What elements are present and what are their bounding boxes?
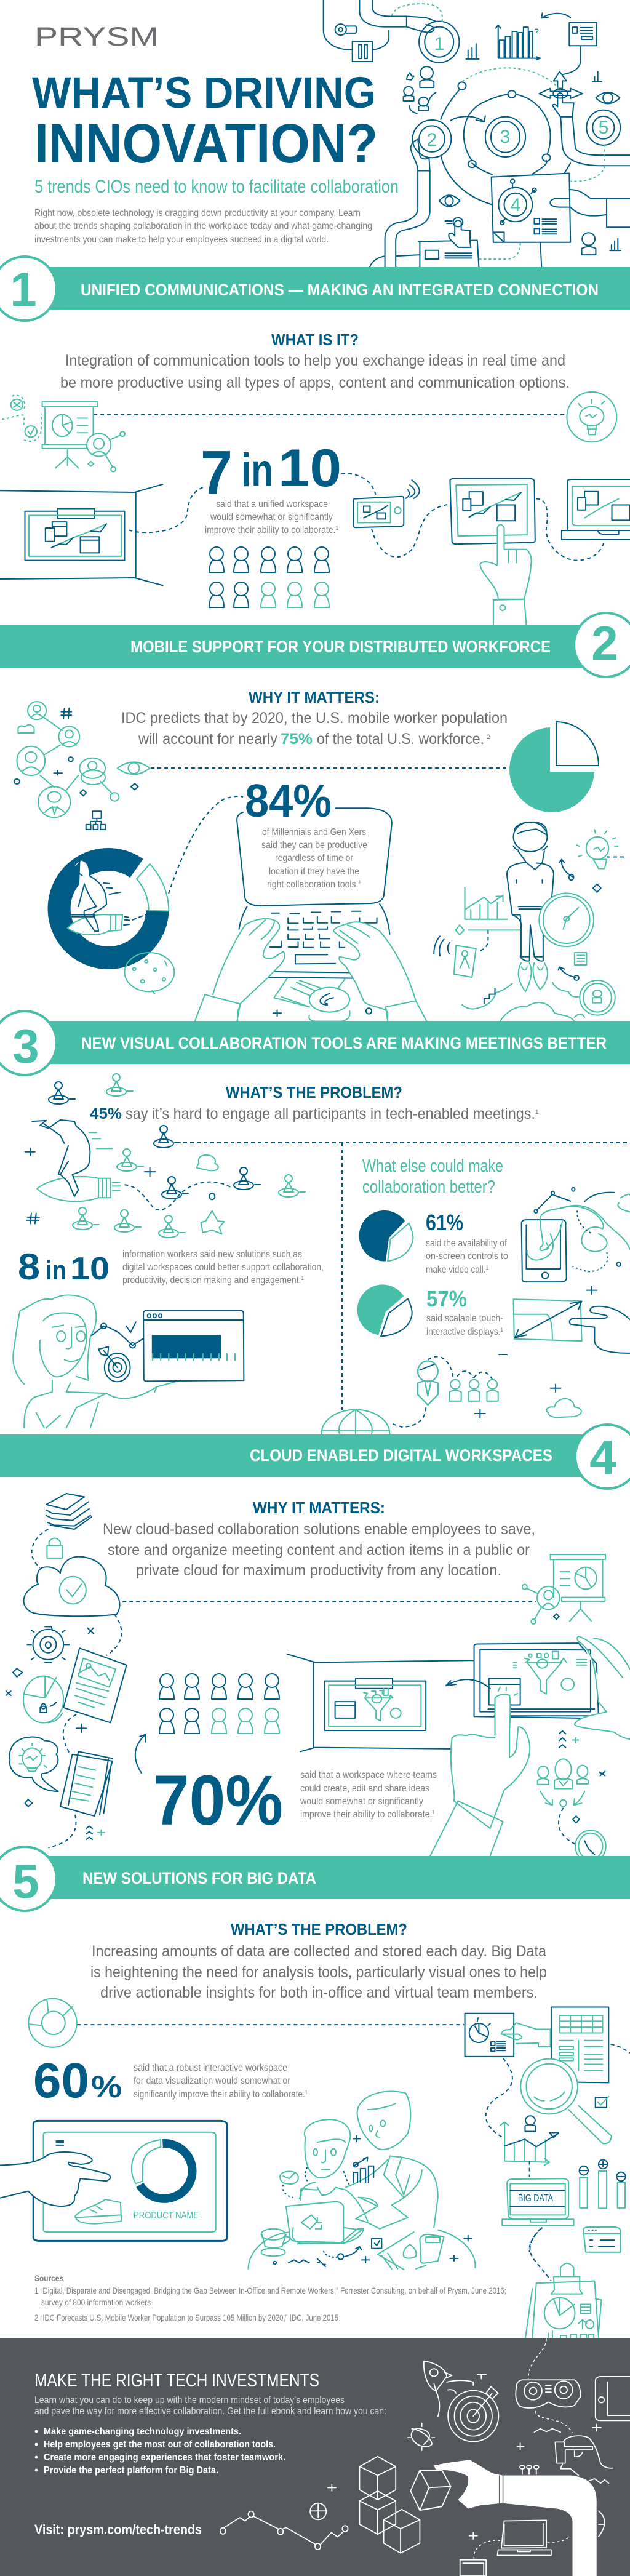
section 3 heading: WHAT’S THE PROBLEM?	[226, 1083, 402, 1102]
section 2 description: IDC predicts that by 2020, the U.S. mobile worker population	[121, 710, 508, 727]
caption: 84 percent: 1	[358, 879, 361, 886]
presentation icon	[522, 1554, 605, 1624]
icon: cloud and documents	[23, 1494, 119, 1616]
caption: 7 in 10: said that a unified workspace	[216, 499, 328, 510]
subheading: what else: What else could make	[362, 1156, 503, 1176]
statistic: 60 percent: 60	[33, 2053, 89, 2108]
pie chart: 75 percent	[509, 722, 599, 812]
statistic: 60 percent	[33, 2053, 122, 2108]
panel: call to action	[0, 2338, 630, 2576]
section 2 description: will account for nearly	[138, 730, 277, 748]
bullet list: Provide the perfect platform for Big Data.	[44, 2465, 218, 2476]
phone	[354, 480, 420, 527]
header illustration: five trends network: 4	[511, 195, 520, 215]
two colleagues with laptop	[346, 2091, 438, 2229]
caption: 8 in 10	[122, 1249, 324, 1286]
label: big data: BIG DATA	[518, 2193, 553, 2204]
caption: 70 percent: could create, edit and share ideas	[300, 1783, 429, 1794]
caption: 61 percent: make video call.	[426, 1265, 494, 1275]
title: INNOVATION?	[34, 113, 378, 175]
laptop with hands illustration	[195, 808, 627, 1022]
section 5 description	[90, 1943, 547, 2001]
statistic: 7 in 10: 10	[278, 439, 341, 498]
caption: 70 percent: would somewhat or significantly	[300, 1796, 423, 1807]
call to action text	[34, 2395, 386, 2417]
section 1 description	[60, 352, 570, 391]
statistic: 61 percent: 61%	[426, 1210, 463, 1235]
logo: PRYSM	[34, 22, 159, 52]
tablet	[450, 478, 535, 544]
bullet list: Help employees get the most out of collaboration tools.	[44, 2439, 276, 2450]
white line illustrations	[220, 2338, 630, 2576]
network of people icons	[14, 702, 150, 830]
hand pointing	[480, 524, 532, 625]
sources: 1 “Digital, Disparate and Disengaged: Bridging the Gap Between In-Office and Remote Workers,” Forrester Consulting, on behalf of Prysm, June 2016;	[34, 2286, 506, 2295]
intro text: about the trends shaping collaboration in the workplace today and what game-changing	[34, 221, 372, 231]
band 2: mobile support: MOBILE SUPPORT FOR YOUR DISTRIBUTED WORKFORCE	[130, 638, 551, 656]
magnifier	[520, 2059, 612, 2143]
header illustration: five trends network: ?	[534, 26, 539, 36]
section 5 description: is heightening the need for analysis tools, particularly visual ones to help	[90, 1964, 547, 1981]
caption: 7 in 10: improve their ability to collaborate.	[205, 525, 349, 535]
section 2 description: 2	[487, 734, 490, 741]
clipboard	[525, 2263, 602, 2338]
people icons: 70 percent	[159, 1674, 279, 1734]
title: WHAT’S DRIVING	[32, 69, 376, 118]
statistic: 70 percent: 70%	[153, 1761, 283, 1840]
statistic: 8 in 10: in	[46, 1255, 66, 1286]
line chart	[220, 2484, 348, 2550]
section 4 heading: WHY IT MATTERS:	[253, 1498, 385, 1517]
phone and touch illustrations	[321, 1188, 630, 1457]
section 4 description: private cloud for maximum productivity from any location.	[136, 1562, 501, 1579]
caption: 61 percent	[426, 1238, 508, 1275]
call to action heading: MAKE THE RIGHT TECH INVESTMENTS	[34, 2369, 319, 2391]
header illustration: five trends network: 1	[434, 34, 444, 54]
statistic: 7 in 10: 7	[201, 438, 233, 507]
caption: 84 percent: regardless of time or	[275, 853, 353, 863]
statistic: 7 in 10: in	[241, 444, 273, 497]
sources	[34, 2273, 506, 2322]
dashed connector	[94, 414, 567, 415]
caption: 60 percent: said that a robust interactive workspace	[134, 2063, 287, 2073]
caption: 61 percent: on-screen controls to	[426, 1251, 508, 1262]
band 3: visual collaboration	[0, 1011, 630, 1075]
caption: 70 percent: 1	[432, 1809, 435, 1815]
section 1 heading: WHAT IS IT?	[271, 330, 359, 349]
caption: 70 percent	[300, 1770, 437, 1820]
woman presenting dashboard illustration	[13, 1295, 244, 1428]
section 5 illustrations	[0, 1999, 630, 2338]
caption: 7 in 10: would somewhat or significantly	[210, 512, 333, 522]
caption: 57 percent	[426, 1313, 503, 1337]
caption: 8 in 10: digital workspaces could better support collaboration,	[122, 1262, 324, 1273]
band 3: visual collaboration: 3	[12, 1019, 39, 1073]
bullet list: Make game-changing technology investments.	[44, 2426, 241, 2437]
band 1: unified communications	[0, 257, 630, 321]
call to action text: and pave the way for more effective collaboration. Get the full ebook and learn how you can:	[34, 2406, 386, 2417]
label: product name: PRODUCT NAME	[134, 2210, 199, 2221]
sources: 2 “IDC Forecasts U.S. Mobile Worker Population to Surpass 105 Million by 2020,” IDC, June 2015	[34, 2313, 338, 2322]
caption: 70 percent: said that a workspace where teams	[300, 1770, 437, 1780]
caption: 60 percent: 1	[305, 2089, 308, 2095]
caption: 84 percent: right collaboration tools.	[267, 879, 368, 890]
icon: presentation board	[11, 399, 125, 471]
band 1: unified communications: 1	[10, 262, 37, 316]
caption: 7 in 10: 1	[335, 525, 338, 531]
rocket and meeting participants illustration	[25, 1074, 305, 1238]
section 2 description	[121, 710, 508, 748]
left column of icons	[6, 1626, 94, 1695]
subheading: what else	[362, 1156, 503, 1197]
band 5: big data: 5	[12, 1854, 39, 1908]
wall display and hand	[287, 1654, 474, 1751]
header illustration: five trends network: 5	[599, 118, 608, 138]
header illustration: five trends network: 3	[500, 127, 510, 147]
caption: 7 in 10	[205, 499, 338, 535]
caption: 60 percent: for data visualization would somewhat or	[134, 2076, 290, 2086]
section 3 statement: say it’s hard to engage all participants in tech-enabled meetings.	[126, 1105, 535, 1122]
intro text: investments you can make to help your employees succeed in a digital world.	[34, 234, 329, 245]
band 4: cloud workspaces	[0, 1425, 630, 1489]
donut chart with rocket rider	[59, 796, 243, 994]
sources: Sources	[34, 2273, 63, 2283]
section 5 description: drive actionable insights for both in-office and virtual team members.	[100, 1984, 538, 2001]
caption: 57 percent: interactive displays.	[426, 1327, 509, 1337]
caption: 60 percent: significantly improve their ability to collaborate.	[134, 2089, 330, 2100]
caption: 84 percent	[261, 827, 367, 890]
caption: 8 in 10: information workers said new solutions such as	[122, 1249, 302, 1260]
band 5: big data	[0, 1847, 630, 1911]
man on rockets	[507, 822, 554, 961]
caption: 57 percent: 1	[501, 1327, 503, 1333]
arm holding cube	[434, 2460, 597, 2576]
caption: 84 percent: said they can be productive	[261, 840, 367, 850]
statistic: 7 in 10	[201, 438, 341, 507]
caption: 61 percent: 1	[486, 1265, 488, 1271]
bullet list: Create more engaging experiences that foster teamwork.	[44, 2452, 285, 2463]
section 5 description: Increasing amounts of data are collected and stored each day. Big Data	[92, 1943, 546, 1960]
section 4 illustrations	[6, 1494, 630, 1862]
statistic: 60 percent: %	[91, 2070, 122, 2104]
wall display	[0, 484, 162, 585]
laptop	[562, 479, 630, 540]
dashed connector	[151, 767, 509, 769]
band 4: cloud workspaces: 4	[589, 1430, 616, 1484]
intro text	[34, 208, 372, 245]
coffee and table	[249, 2228, 476, 2270]
tablet with hand and donut	[33, 2121, 227, 2241]
band 2: mobile support	[0, 613, 630, 677]
dashed dividers	[177, 1143, 630, 1410]
caption: 61 percent: said the availability of	[426, 1238, 508, 1249]
statistic: 8 in 10	[18, 1246, 110, 1287]
caption: 84 percent: location if they have the	[269, 866, 359, 877]
big data laptop	[502, 2178, 573, 2226]
data documents	[465, 2007, 608, 2082]
caption: 57 percent: said scalable touch-	[426, 1313, 503, 1324]
statistic: 8 in 10: 10	[70, 1251, 110, 1287]
icon: light bulb	[567, 392, 616, 442]
section 2 heading: WHY IT MATTERS:	[249, 688, 380, 706]
caption: 60 percent	[134, 2063, 308, 2100]
header illustration: five trends network	[324, 0, 630, 268]
caption: 84 percent: of Millennials and Gen Xers	[262, 827, 366, 838]
band 4: cloud workspaces: CLOUD ENABLED DIGITAL WORKSPACES	[250, 1446, 552, 1465]
section 2 description: 75%	[281, 730, 313, 748]
section 3 statement: 1	[535, 1109, 539, 1116]
cubes	[359, 2457, 451, 2553]
section 1 illustrations	[0, 392, 630, 625]
subheading: what else: collaboration better?	[362, 1177, 495, 1197]
caption: 70 percent: improve their ability to collaborate.	[300, 1809, 445, 1820]
section 4 description: store and organize meeting content and action items in a public or	[108, 1542, 530, 1559]
people icons: 7 of 10	[209, 547, 329, 607]
intro text: Right now, obsolete technology is dragging down productivity at your company. Learn	[34, 208, 361, 218]
call to action text: Learn what you can do to keep up with the modern mindset of today’s employees	[34, 2395, 345, 2406]
sources: survey of 800 information workers	[41, 2297, 151, 2307]
section 4 description: New cloud-based collaboration solutions enable employees to save,	[103, 1521, 535, 1538]
pie chart: 57 percent	[357, 1284, 412, 1337]
section 2 description: of the total U.S. workforce.	[317, 730, 484, 748]
statistic: 8 in 10: 8	[18, 1246, 40, 1287]
band 5: big data: NEW SOLUTIONS FOR BIG DATA	[82, 1869, 316, 1887]
statistic: 57 percent: 57%	[426, 1286, 467, 1311]
section 1 description: be more productive using all types of apps, content and communication options.	[60, 374, 570, 391]
band 2: mobile support: 2	[591, 616, 618, 670]
header illustration: five trends network: 2	[427, 130, 437, 150]
caption: 8 in 10: productivity, decision making and engagement.	[122, 1275, 321, 1286]
pie chart: 61 percent	[359, 1210, 413, 1261]
chart with person	[500, 2122, 549, 2166]
caption: 8 in 10: 1	[301, 1275, 304, 1281]
visit link: Visit: prysm.com/tech-trends	[34, 2522, 202, 2537]
subtitle: 5 trends CIOs need to know to facilitate collaboration	[34, 177, 399, 197]
rocket target and VR	[408, 2361, 630, 2576]
statistic: 84 percent: 84%	[245, 775, 332, 826]
title	[32, 69, 378, 175]
section 3 statement: 45%	[90, 1105, 122, 1122]
bullet list	[35, 2426, 285, 2476]
donut icon	[28, 1999, 77, 2047]
section 4 description	[103, 1521, 535, 1579]
section 5 heading: WHAT’S THE PROBLEM?	[231, 1920, 407, 1938]
section 1 description: Integration of communication tools to help you exchange ideas in real time and	[65, 352, 565, 369]
